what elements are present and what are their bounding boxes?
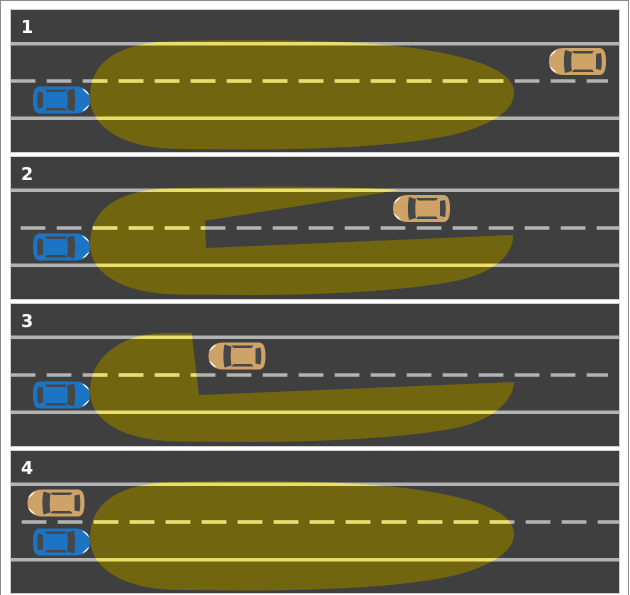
blue car 4 [33, 528, 90, 556]
panel 1: oncoming car far ahead, full beam [10, 10, 620, 152]
blue car 1 [33, 86, 90, 114]
road surface 1 [10, 10, 620, 152]
panel 3: beam cut as car gets closer [10, 304, 620, 446]
lane lines 3 [11, 336, 619, 414]
road surface 2 [10, 156, 620, 300]
tan car 3 [208, 342, 266, 370]
tan car 2 [393, 195, 450, 222]
lane lines 2 [11, 188, 619, 267]
panel number 3: 3 [21, 312, 33, 332]
road surface 3 [10, 304, 620, 446]
beam 1 [90, 40, 514, 149]
panel 2: beam cut around oncoming car [10, 156, 620, 300]
lit lane lines 3 [92, 336, 497, 414]
blue car 2 [33, 234, 90, 260]
beam 2 [90, 187, 513, 295]
tan car 4 [28, 490, 84, 516]
beam 3 [90, 333, 514, 442]
panel number 1: 1 [21, 18, 33, 38]
lit lane lines 1 [92, 42, 504, 120]
beam 4 [90, 481, 514, 590]
lit lane lines 2 [92, 188, 498, 267]
blue car 3 [33, 382, 90, 408]
lit lane lines 4 [94, 482, 511, 562]
panel 4: car passed, full beam restored [10, 450, 620, 594]
panel number 4: 4 [21, 459, 33, 479]
lane lines 1 [11, 42, 619, 120]
tan car 1 [549, 48, 606, 75]
road surface 4 [10, 450, 620, 594]
panel number 2: 2 [21, 165, 33, 185]
lane lines 4 [11, 482, 619, 562]
